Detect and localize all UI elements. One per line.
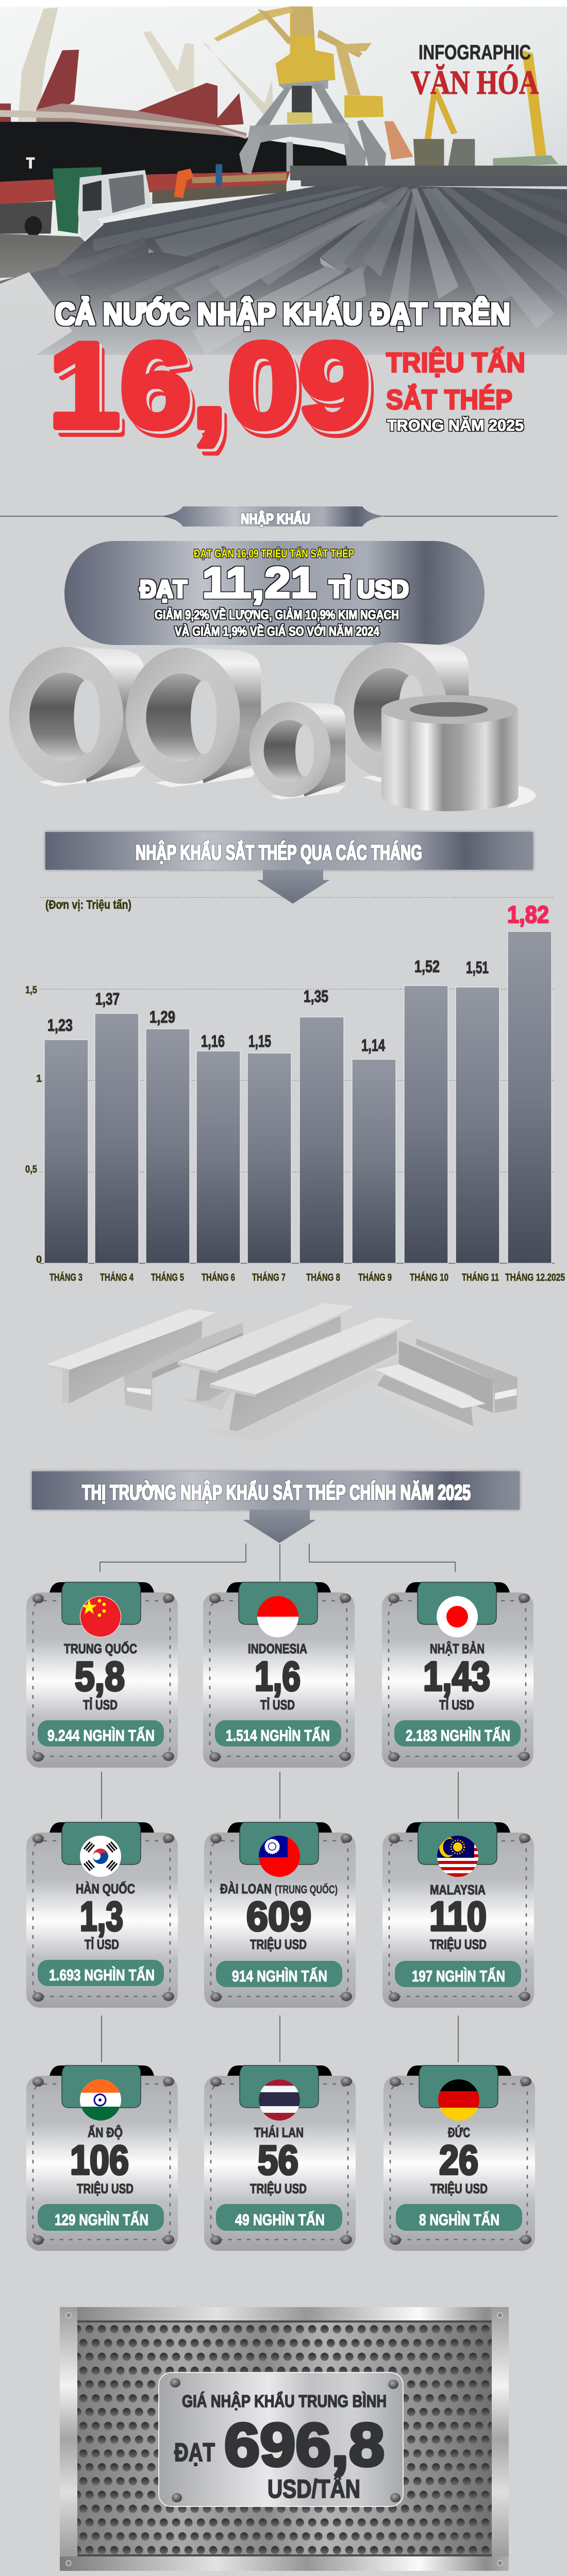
icon: flag of Germany	[438, 2079, 479, 2121]
card: Trung Quốc: TRUNG QUỐC	[64, 1641, 137, 1656]
card: Trung Quốc	[26, 1582, 178, 1768]
icon: flag of Japan	[437, 1596, 478, 1637]
card: Đức	[383, 2065, 535, 2251]
card: Ấn Độ: TRIỆU USD	[77, 2181, 134, 2196]
value labels: 1,51	[466, 958, 489, 977]
headline line: CẢ NƯỚC NHẬP KHẨU ĐẠT TRÊN	[55, 297, 510, 331]
card: Trung Quốc: 5,8	[75, 1653, 125, 1699]
logo: Infographic Văn Hóa: INFOGRAPHIC	[419, 41, 531, 64]
month labels: THÁNG 9	[358, 1272, 392, 1283]
y axis labels	[25, 985, 42, 1265]
card: Thái Lan: 49 NGHÌN TẤN	[235, 2211, 325, 2229]
icon: flag of India	[80, 2079, 121, 2121]
section heading: main markets	[32, 1471, 520, 1543]
y axis labels: 1	[36, 1073, 42, 1084]
card: Hàn Quốc: 1,3	[80, 1893, 123, 1939]
yellow subline: ĐẠT GẦN 16,09 TRIỆU TẤN SẮT THÉP	[194, 547, 354, 560]
card: Ấn Độ	[26, 2065, 178, 2251]
month labels: THÁNG 3	[49, 1272, 82, 1283]
value labels: 1,37	[95, 990, 120, 1008]
card: Hàn Quốc: 1.693 NGHÌN TẤN	[49, 1966, 155, 1984]
card: Indonesia	[203, 1582, 355, 1768]
card: Nhật Bản: 1,43	[423, 1653, 490, 1699]
plate number: 696,8	[224, 2411, 385, 2479]
hero photo: port with steel bars	[0, 0, 567, 379]
y axis labels: 1,5	[25, 985, 37, 996]
card: Indonesia: INDONESIA	[248, 1641, 307, 1656]
card: Trung Quốc: TỈ USD	[83, 1697, 118, 1713]
unit note: (Đơn vị: Triệu tấn)	[45, 898, 131, 912]
month labels: THÁNG 4	[100, 1272, 134, 1283]
card: Hàn Quốc	[26, 1822, 178, 2008]
card: Indonesia: 1,6	[255, 1653, 301, 1699]
arrow	[243, 1510, 316, 1543]
card: Nhật Bản: TỈ USD	[439, 1697, 474, 1713]
icon: flag of Taiwan	[259, 1836, 300, 1877]
card: Đài Loan (Trung Quốc): 609	[246, 1893, 311, 1939]
card: Đức: ĐỨC	[448, 2125, 470, 2140]
month labels	[49, 1272, 565, 1283]
card: Nhật Bản: NHẬT BẢN	[430, 1641, 485, 1656]
value labels: 1,82	[507, 901, 549, 928]
card: Thái Lan: 56	[258, 2137, 298, 2183]
card: Ấn Độ: ẤN ĐỘ	[88, 2125, 123, 2140]
arrow	[257, 870, 330, 904]
section heading: Nhập khẩu	[0, 506, 558, 528]
card: Thái Lan: TRIỆU USD	[250, 2181, 307, 2196]
value labels: 1,52	[414, 957, 440, 976]
panel: average import price	[60, 2307, 509, 2571]
year text: TRONG NĂM 2025	[387, 416, 524, 434]
bar chart: monthly imports	[25, 897, 565, 1283]
card: Malaysia: 197 NGHÌN TẤN	[412, 1967, 505, 1985]
value labels: 1,16	[201, 1032, 225, 1050]
unit text: TRIỆU TẤN	[386, 347, 525, 378]
icon: flag of South Korea	[80, 1836, 121, 1877]
logo: Infographic Văn Hóa	[411, 41, 539, 101]
connector lines	[100, 1544, 458, 2062]
card: Đài Loan (Trung Quốc): (TRUNG QUỐC)	[275, 1883, 338, 1896]
section heading: monthly imports: NHẬP KHẨU SẮT THÉP QUA CÁC THÁNG	[136, 840, 422, 865]
value labels: 1,23	[47, 1016, 73, 1035]
value labels: 1,29	[149, 1008, 175, 1026]
card: Đài Loan (Trung Quốc): TRIỆU USD	[250, 1937, 307, 1952]
illustration: steel coils	[9, 642, 536, 811]
value labels	[47, 901, 549, 1055]
big number 16,09: 16,09	[48, 317, 370, 453]
value labels: 1,35	[304, 987, 328, 1006]
value number: 11,21	[202, 558, 316, 607]
card: Đài Loan (Trung Quốc)	[204, 1822, 356, 2008]
card: Nhật Bản: 2.183 NGHÌN TẤN	[406, 1726, 510, 1744]
plate label: ĐẠT	[174, 2438, 215, 2467]
inner plate	[159, 2372, 403, 2506]
section heading: monthly imports	[45, 832, 533, 904]
card: Thái Lan: THÁI LAN	[254, 2125, 304, 2140]
month labels: THÁNG 7	[252, 1272, 286, 1283]
card: Malaysia: 110	[429, 1893, 487, 1939]
plate unit: USD/TẤN	[268, 2475, 360, 2503]
big number 16,09: 16,09	[54, 324, 375, 460]
card: Đài Loan (Trung Quốc): ĐÀI LOAN	[220, 1881, 272, 1896]
card: Malaysia: MALAYSIA	[430, 1882, 486, 1897]
card: Indonesia: 1.514 NGHÌN TẤN	[226, 1726, 330, 1744]
month labels: THÁNG 8	[306, 1272, 340, 1283]
card: Thái Lan	[204, 2065, 356, 2251]
card: Ấn Độ: 129 NGHÌN TẤN	[55, 2211, 148, 2229]
icon: flag of China	[80, 1596, 121, 1637]
month labels: THÁNG 6	[202, 1272, 235, 1283]
icon: flag of Indonesia	[257, 1596, 298, 1637]
bars	[44, 931, 552, 1263]
change line one: GIẢM 9,2% VỀ LƯỢNG, GIẢM 10,9% KIM NGẠCH	[155, 607, 399, 622]
value label: ĐẠT	[140, 576, 187, 603]
section heading: Nhập khẩu: NHẬP KHẨU	[241, 510, 310, 528]
card: Trung Quốc: 9.244 NGHÌN TẤN	[47, 1726, 155, 1744]
card: Đức: 8 NGHÌN TẤN	[419, 2211, 499, 2229]
card: Ấn Độ: 106	[70, 2137, 129, 2183]
y axis labels: 0	[36, 1254, 42, 1265]
card: Nhật Bản	[382, 1582, 533, 1768]
month labels: THÁNG 11	[462, 1272, 499, 1283]
logo: Infographic Văn Hóa: VĂN HÓA	[411, 64, 539, 101]
title	[48, 297, 525, 460]
icon: flag of Malaysia	[437, 1836, 478, 1877]
value labels: 1,15	[248, 1032, 271, 1050]
month labels: THÁNG 5	[151, 1272, 184, 1283]
month labels: THÁNG 10	[410, 1272, 448, 1283]
value labels: 1,14	[361, 1036, 385, 1055]
big number 16,09: 16,09	[51, 320, 373, 455]
value unit: TỈ USD	[329, 575, 409, 603]
change line two: VÀ GIẢM 1,9% VỀ GIÁ SO VỚI NĂM 2024	[175, 623, 379, 639]
card: Hàn Quốc: HÀN QUỐC	[76, 1881, 135, 1896]
card: Hàn Quốc: TỈ USD	[85, 1937, 119, 1952]
product text: SẮT THÉP	[386, 384, 512, 415]
y axis labels: 0,5	[25, 1164, 37, 1175]
plate heading: GIÁ NHẬP KHẨU TRUNG BÌNH	[182, 2392, 387, 2411]
card: Đài Loan (Trung Quốc): 914 NGHÌN TẤN	[232, 1967, 327, 1985]
card: Malaysia: TRIỆU USD	[430, 1937, 487, 1952]
illustration: steel I-beams	[46, 1303, 518, 1442]
card: Indonesia: TỈ USD	[260, 1697, 295, 1713]
icon: flag of Thailand	[259, 2079, 300, 2121]
card: Đức: 26	[439, 2137, 478, 2183]
card: Malaysia	[382, 1822, 534, 2008]
card: Đức: TRIỆU USD	[430, 2181, 488, 2196]
panel: import value	[64, 541, 485, 645]
